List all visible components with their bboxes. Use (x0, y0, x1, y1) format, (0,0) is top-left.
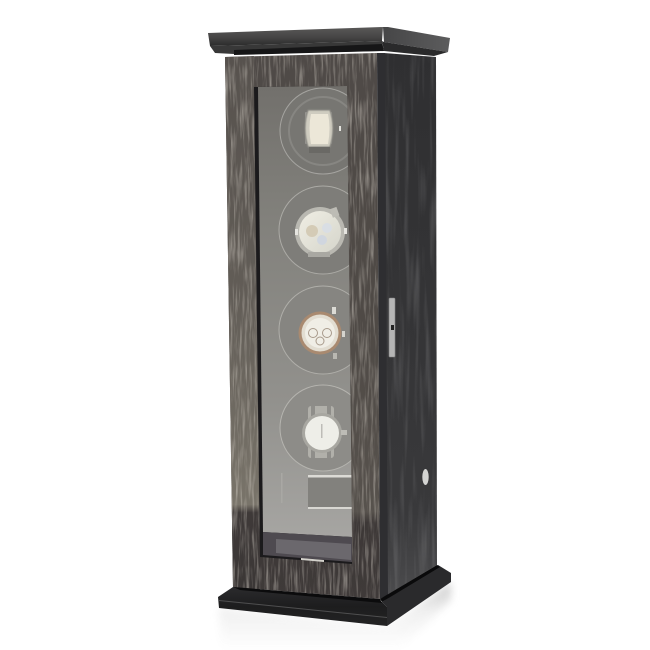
panel: cabinet side (384, 50, 440, 600)
winder 3 (278, 286, 350, 374)
winder units (278, 88, 352, 509)
plinth base (218, 565, 451, 626)
cornice crown (208, 27, 450, 56)
panel: cabinet front frame (222, 50, 384, 602)
lower drawer panel (276, 539, 351, 560)
left stile (225, 56, 260, 590)
power socket (422, 469, 429, 485)
winder 4 (280, 384, 352, 472)
door window (254, 86, 352, 564)
glass (258, 86, 352, 537)
winder 2 (278, 186, 349, 274)
lower compartment (263, 532, 352, 562)
illustration: watch winder cabinet (208, 27, 454, 629)
edge strip (377, 53, 388, 599)
window recess (254, 86, 352, 564)
door handle (301, 558, 324, 562)
control display (281, 473, 352, 509)
winder 1 (280, 88, 348, 174)
door latch (389, 298, 395, 357)
floor reflection (219, 582, 451, 650)
